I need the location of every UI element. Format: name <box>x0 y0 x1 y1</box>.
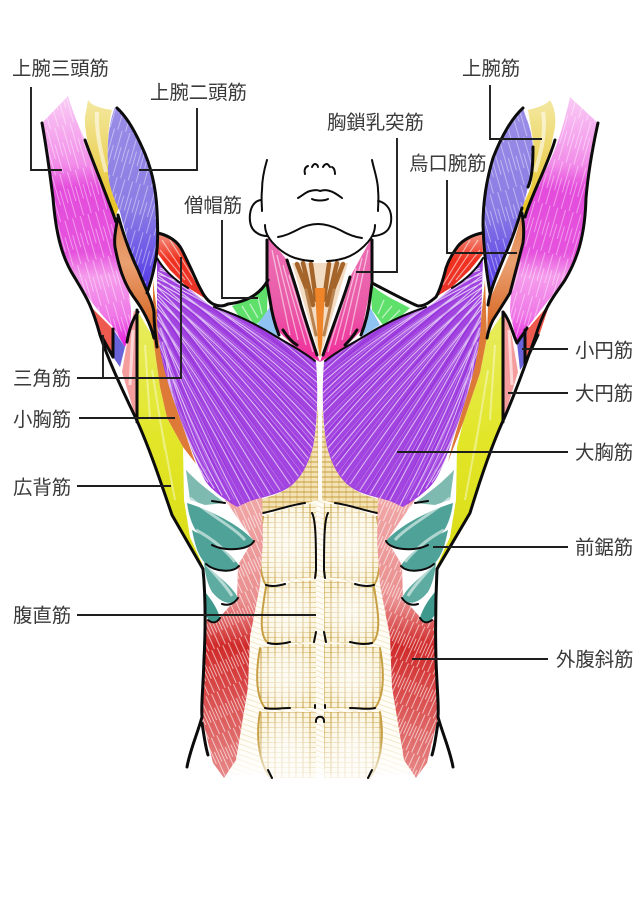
muscle: trapezius right <box>370 283 410 325</box>
rectus segments <box>222 503 418 786</box>
panel: neck <box>232 237 410 362</box>
muscle: scalene right <box>362 307 380 336</box>
upper chest sheath <box>258 360 382 514</box>
muscle: biceps right <box>483 108 533 293</box>
muscle: pectoralis minor right <box>448 280 487 462</box>
muscle: sternocleidomastoid right <box>320 237 372 362</box>
muscle: teres minor left <box>89 305 125 367</box>
panel: abdomen <box>12 58 634 786</box>
labels: 上腕三頭筋 <box>12 58 109 80</box>
leader lines <box>31 85 568 659</box>
labels: 外腹斜筋 <box>556 649 634 671</box>
nose <box>305 164 335 174</box>
muscle: external oblique right <box>377 497 438 778</box>
labels <box>12 58 634 671</box>
labels: 上腕筋 <box>462 58 520 80</box>
head outline <box>250 160 391 261</box>
black contours: right arm <box>372 108 598 767</box>
muscle: triceps left <box>42 96 131 347</box>
pale abdominal sheath <box>222 500 418 775</box>
muscle: triceps right <box>510 97 598 343</box>
muscle: sternocleidomastoid left <box>267 237 320 362</box>
muscle: teres minor right <box>517 303 550 370</box>
muscle: teres major left <box>122 311 138 422</box>
labels: 前鋸筋 <box>575 537 633 559</box>
right face and ear <box>327 160 391 261</box>
labels: 腹直筋 <box>13 605 71 627</box>
labels: 小円筋 <box>575 340 633 362</box>
labels: 三角筋 <box>13 368 71 390</box>
mouth <box>298 190 342 200</box>
muscle: teres major right <box>503 311 518 422</box>
muscle: coracobrachialis left <box>115 217 154 338</box>
muscle: brachialis right <box>522 100 555 217</box>
muscle: pectoralis major left <box>157 260 318 507</box>
labels: 上腕二頭筋 <box>150 82 247 104</box>
panel: right arm <box>372 97 598 767</box>
muscle: external oblique left <box>202 497 263 778</box>
muscle: biceps left <box>108 107 158 293</box>
muscle: pectoralis major right <box>322 260 483 507</box>
labels: 僧帽筋 <box>184 195 242 217</box>
muscle: deltoid left <box>158 233 206 299</box>
left face and ear <box>250 160 313 261</box>
labels: 胸鎖乳突筋 <box>327 112 424 134</box>
labels: 大胸筋 <box>575 442 633 464</box>
muscle: deltoid right <box>436 233 483 297</box>
labels: 広背筋 <box>13 477 71 499</box>
muscle: brachialis left <box>85 100 119 218</box>
muscle: scalene left <box>257 307 279 337</box>
muscle: pectoralis minor left <box>153 280 196 464</box>
muscle: coracobrachialis right <box>487 213 524 338</box>
muscle: latissimus dorsi left <box>137 310 205 570</box>
muscle: rectus abdominis <box>222 360 418 786</box>
black contours: left arm <box>42 108 268 767</box>
labels: 小胸筋 <box>13 409 71 431</box>
panel: left arm <box>42 96 268 767</box>
muscle: deep neck <box>292 263 348 358</box>
muscle: trapezius left <box>232 280 268 324</box>
muscle: latissimus dorsi right <box>435 313 503 570</box>
labels: 烏口腕筋 <box>409 153 487 175</box>
labels: 大円筋 <box>575 383 633 405</box>
chin crease <box>278 224 362 238</box>
muscle: serratus anterior left <box>186 470 254 622</box>
muscle: serratus anterior right <box>386 470 454 622</box>
